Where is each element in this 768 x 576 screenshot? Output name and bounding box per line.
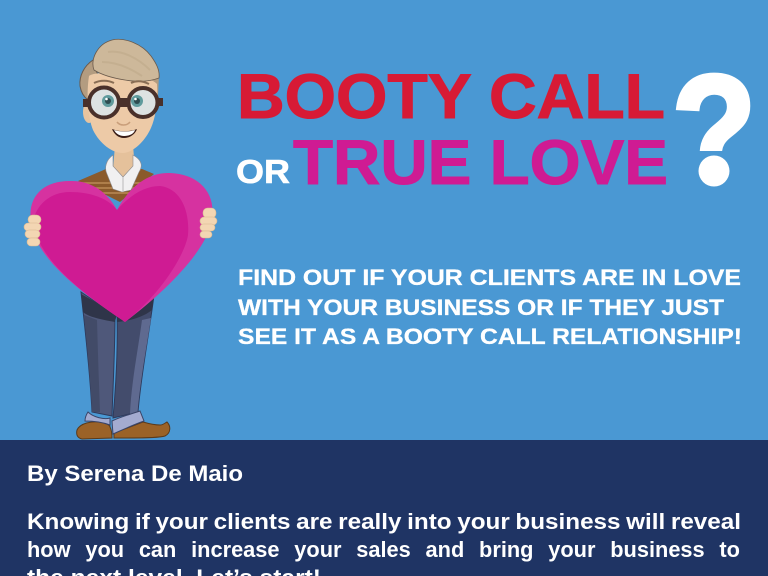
question mark [676, 72, 750, 186]
subtitle text block: SEE IT AS A BOOTY CALL RELATIONSHIP! [238, 324, 742, 349]
shirt collar [106, 155, 141, 192]
legs [81, 292, 154, 418]
eyebrows [94, 81, 149, 84]
glasses [83, 88, 163, 118]
hand: left [24, 215, 41, 246]
author byline: By Serena De Maio [27, 461, 243, 486]
heart [30, 173, 213, 322]
question mark: ? [672, 44, 756, 218]
nose [117, 122, 130, 125]
footer panel: author and intro [0, 440, 768, 576]
neck [113, 145, 135, 180]
illustration: man holding a pink heart [24, 39, 217, 439]
intro paragraph: how you can increase your sales and bring your business to [27, 537, 740, 562]
title line: true love: TRUE LOVE [293, 128, 668, 198]
title line: booty call: BOOTY CALL [237, 62, 665, 132]
subtitle text block: WITH YOUR BUSINESS OR IF THEY JUST [238, 295, 724, 320]
shoes [77, 422, 170, 439]
intro paragraph: Knowing if your clients are really into your business will reveal [27, 509, 741, 534]
title [237, 72, 750, 186]
head [80, 39, 163, 153]
title word: or: OR [236, 153, 290, 190]
ears [83, 101, 95, 123]
front hair [93, 39, 159, 81]
face [88, 73, 157, 153]
subtitle text block [238, 265, 742, 349]
mouth [112, 129, 137, 138]
intro paragraph [27, 509, 741, 576]
back hair [80, 60, 98, 100]
hand: right [200, 208, 217, 238]
subtitle text block: FIND OUT IF YOUR CLIENTS ARE IN LOVE [238, 265, 741, 290]
sweater [78, 169, 154, 202]
trouser cuffs [85, 411, 144, 434]
eyes [102, 95, 143, 107]
